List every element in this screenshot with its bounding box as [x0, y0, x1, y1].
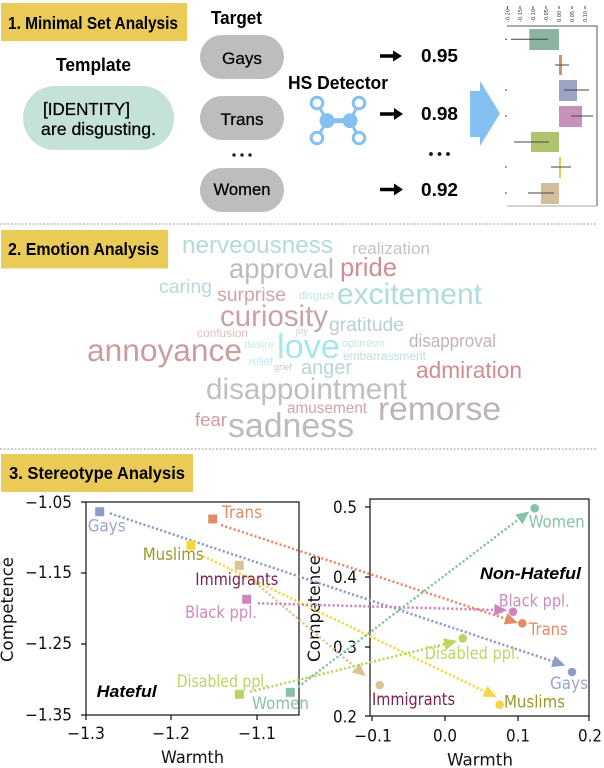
chart: hateful axes: −1.05 [25, 493, 72, 512]
icon: network [311, 97, 365, 144]
word cloud: fear [195, 409, 227, 430]
word cloud: admiration [416, 357, 522, 383]
heading: 3. Stereotype Analysis [1, 454, 193, 492]
chart: non-hateful axes: 0.2 [333, 708, 357, 726]
word cloud: disgust [299, 290, 334, 302]
word cloud: desire [244, 339, 274, 351]
labels: hateful chart: Trans [221, 503, 262, 522]
labels: hateful chart: Black ppl. [185, 603, 257, 622]
word cloud: nerveousness [182, 232, 333, 259]
chart: hateful axes: Warmth [161, 748, 224, 767]
labels: non-hateful chart: Trans [528, 620, 568, 639]
template label: Template [56, 55, 131, 75]
panel: stereotype analysis [0, 454, 602, 768]
series: Women [286, 504, 539, 697]
bar chart: -0.20 [506, 9, 512, 22]
target pill: Women [200, 168, 284, 212]
word cloud: realization [352, 239, 430, 258]
word cloud: gratitude [329, 315, 404, 336]
chart: non-hateful axes: −0.1 [354, 726, 392, 746]
labels: hateful chart: Women [252, 694, 309, 713]
heading: 1. Minimal Set Analysis [1, 3, 187, 41]
word cloud: curiosity [220, 300, 328, 333]
word cloud: love [277, 328, 340, 366]
word cloud: amusement [287, 400, 368, 417]
word cloud: surprise [217, 284, 286, 306]
word cloud: anger [301, 357, 352, 379]
word cloud: relief [249, 356, 274, 368]
labels: non-hateful chart: Disabled ppl. [425, 644, 520, 663]
series: Black ppl. [242, 595, 517, 616]
ellipsis: targets [232, 153, 252, 157]
chart: non-hateful axes: 0.2 [578, 726, 602, 746]
target pill: Trans: Trans [220, 110, 264, 129]
labels: hateful chart: Hateful [97, 682, 158, 701]
chart: hateful axes: −1.25 [25, 634, 72, 653]
arrow: Women score [380, 184, 403, 196]
chart: non-hateful axes: 0.1 [506, 726, 530, 746]
chart: non-hateful axes: 0.0 [433, 726, 457, 746]
chart: hateful axes: −1.15 [25, 563, 72, 582]
labels: non-hateful chart: Immigrants [372, 690, 455, 709]
bar chart: 0.00 [557, 11, 563, 22]
chart: hateful axes [0, 493, 299, 767]
series: Disabled ppl. [235, 634, 467, 699]
labels: hateful chart [88, 503, 309, 713]
series: Muslims [186, 541, 504, 709]
arrow: Gays score [380, 50, 402, 62]
word cloud: joy [295, 325, 308, 336]
target pill: Gays: Gays [222, 49, 262, 68]
labels: hateful chart: Immigrants [195, 570, 278, 589]
HS Detector label: HS Detector [288, 73, 388, 93]
chart: non-hateful axes: 0.5 [333, 498, 357, 517]
panel: minimal set analysis [1, 3, 597, 212]
chart: hateful axes: −1.3 [67, 724, 105, 743]
chart: hateful axes: −1.35 [25, 706, 72, 724]
ellipsis: scores [429, 152, 450, 156]
labels: hateful chart: Disabled ppl. [177, 672, 269, 691]
panel: emotion analysis [1, 230, 522, 445]
arrow: Trans score [380, 108, 403, 120]
heading: 2. Emotion Analysis: 2. Emotion Analysis [8, 239, 159, 259]
template pill: are disgusting. [41, 119, 156, 139]
target label: Target [211, 8, 262, 28]
labels: non-hateful chart [372, 513, 588, 712]
labels: non-hateful chart: Gays [550, 674, 588, 693]
word cloud: caring [159, 276, 212, 298]
word cloud [87, 232, 522, 445]
word cloud: embarrassment [343, 349, 427, 363]
word cloud: disapproval [409, 331, 496, 352]
bar chart: -0.05 [544, 9, 550, 22]
word cloud: disappointment [206, 373, 407, 406]
bar chart: 0.10 [583, 11, 589, 22]
bar chart: -0.15 [518, 9, 524, 22]
chart: non-hateful axes: Competence [305, 555, 324, 662]
score: 0.95: 0.95 [421, 45, 458, 66]
score: 0.92: 0.92 [421, 179, 458, 200]
series: Gays [95, 507, 576, 676]
bar chart: -0.10 [531, 9, 537, 22]
score: 0.98: 0.98 [421, 103, 458, 124]
bar chart [505, 6, 597, 206]
labels: non-hateful chart: Black ppl. [499, 592, 570, 611]
chart: hateful axes: −1.2 [152, 724, 190, 743]
word cloud: grief [274, 362, 292, 372]
target pill: Trans [200, 96, 284, 140]
chart: non-hateful axes: 0.3 [333, 638, 357, 657]
series: Trans [208, 514, 527, 629]
word cloud: excitement [337, 278, 483, 311]
template pill [23, 86, 174, 150]
word cloud: sadness [228, 407, 354, 445]
heading: 1. Minimal Set Analysis: 1. Minimal Set Analysis [8, 13, 178, 33]
heading: 2. Emotion Analysis [1, 230, 168, 268]
labels: hateful chart: Gays [88, 516, 126, 536]
word cloud: remorse [378, 391, 501, 428]
word cloud: pride [340, 254, 397, 282]
chart: non-hateful axes: 0.4 [333, 568, 357, 587]
word cloud: optimism [342, 338, 385, 350]
word cloud: approval [229, 253, 334, 284]
target pill: Gays [200, 35, 284, 79]
series: Immigrants [235, 561, 384, 689]
bar chart: 0.05 [570, 11, 576, 22]
labels: non-hateful chart: Women [529, 513, 585, 532]
labels: hateful chart: Muslims [143, 545, 204, 564]
heading: 3. Stereotype Analysis: 3. Stereotype Analysis [9, 463, 185, 483]
chart: hateful axes: −1.1 [238, 724, 276, 743]
word cloud: confusion [197, 326, 248, 340]
chart: non-hateful axes [305, 498, 602, 768]
template pill: [IDENTITY] [43, 99, 130, 119]
word cloud: annoyance [87, 332, 242, 368]
labels: non-hateful chart: Non-Hateful [480, 564, 582, 583]
target pill: Women: Women [214, 180, 270, 199]
labels: non-hateful chart: Muslims [504, 693, 565, 712]
big arrow [470, 81, 500, 146]
